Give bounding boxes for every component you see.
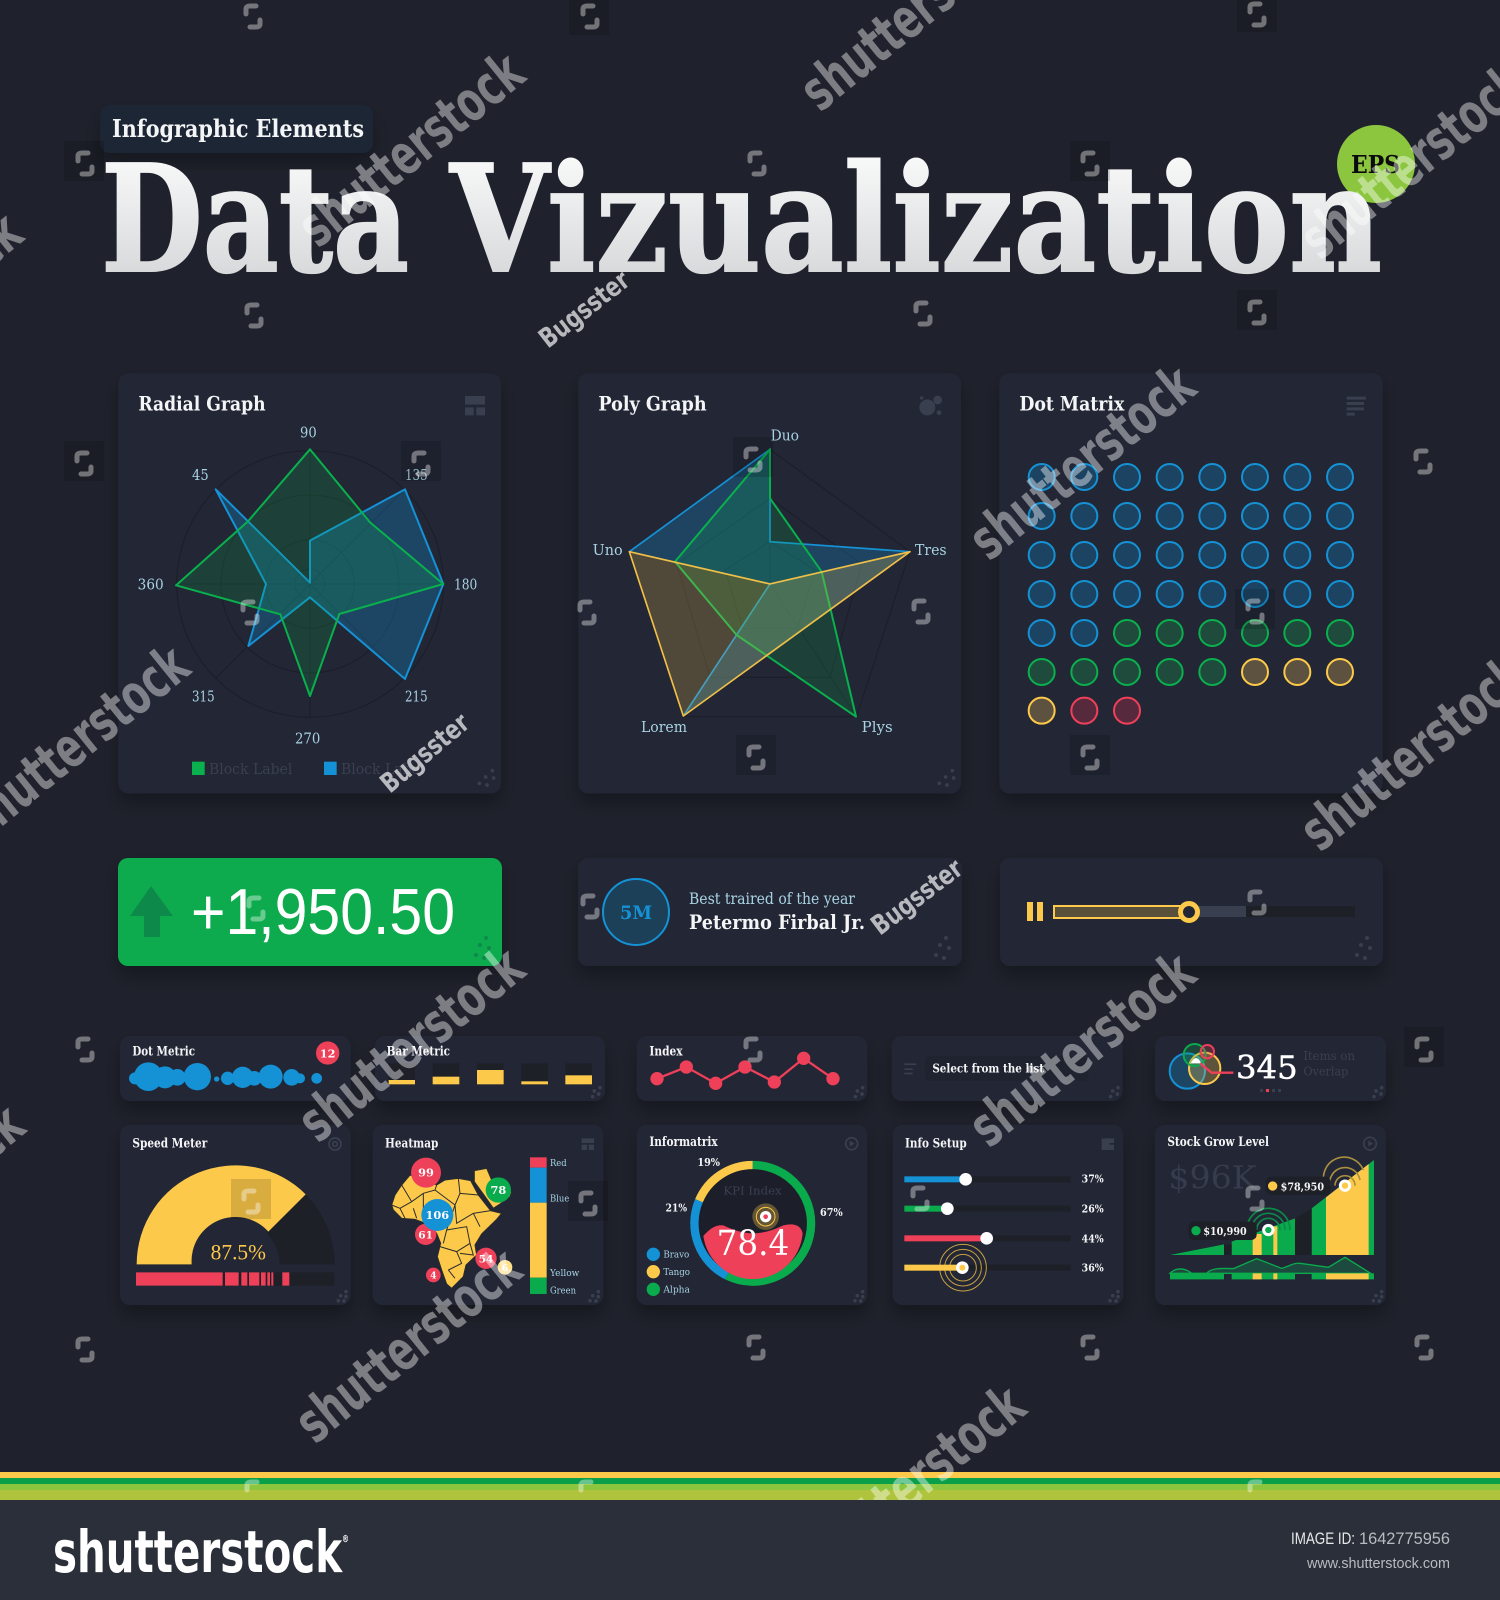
bubbles: 61 [418, 1228, 433, 1241]
venn diagram [1170, 1044, 1233, 1089]
bubbles: 54 [479, 1252, 493, 1265]
panel: Informatrix [637, 1125, 867, 1305]
axis labels: 90 [300, 423, 317, 441]
watermark: shutterstock text: shutterstock [286, 934, 538, 1155]
footer bar [0, 1500, 1500, 1600]
dark gap [1224, 1208, 1312, 1255]
dots: red [1071, 698, 1140, 724]
panel: Index [637, 1036, 867, 1101]
axis labels: 180 [454, 575, 477, 593]
axis labels: Tres [915, 541, 947, 559]
gauge track [267, 1194, 335, 1264]
panel: Select [892, 1036, 1123, 1101]
dots: blue [1029, 464, 1353, 646]
axis labels: 270 [295, 729, 320, 747]
KPI caption: KPI Index [723, 1183, 782, 1197]
panel: green value card [118, 858, 502, 966]
watermark: shutterstock text: shutterstock [787, 1372, 1039, 1593]
label pill: Infographic Elements [100, 105, 373, 153]
area chart yellow [1253, 1164, 1369, 1255]
panel: Info Setup [893, 1125, 1123, 1305]
axis labels: 315 [192, 688, 215, 706]
legend: Alpha [662, 1285, 691, 1295]
mini chart [1170, 1257, 1374, 1279]
name: Petermo Firbal Jr. [689, 910, 865, 934]
dots: yellow [1029, 659, 1353, 724]
axis labels: 45 [192, 466, 209, 484]
icon: list [1347, 397, 1366, 416]
footer logo: ® [342, 1534, 349, 1545]
label pill: Infographic Elements: Infographic Elements [112, 114, 364, 143]
heading: Dot Matrix [1019, 393, 1125, 416]
slider tracks [904, 1176, 1071, 1271]
select label: Select from the list [932, 1062, 1044, 1076]
panel: Dot Metric [120, 1036, 351, 1101]
percent labels: 44% [1082, 1231, 1104, 1245]
percent labels: 21% [666, 1200, 687, 1214]
watermark: Bugsster: Bugsster [533, 265, 636, 355]
markers [1264, 1181, 1350, 1235]
footer image id: www.shutterstock.com [1306, 1555, 1450, 1572]
title: Data [101, 132, 409, 306]
value: 345 [1236, 1048, 1298, 1086]
red bowl [703, 1224, 803, 1279]
progress track [1246, 906, 1355, 917]
donut chart [694, 1165, 811, 1282]
target [752, 1203, 779, 1230]
bubbles: 99 [418, 1166, 434, 1180]
value: +1,950.50 [191, 875, 455, 948]
stacked column [530, 1157, 547, 1294]
tooltip: $10,990: $10,990 [1203, 1224, 1247, 1238]
badge: EPS: EPS [1351, 150, 1400, 179]
KPI value: 78.4 [717, 1224, 789, 1264]
series: blue [629, 449, 910, 716]
tooltip: $10,990 [1188, 1222, 1257, 1240]
badge: 12 [320, 1046, 336, 1060]
radial grid [177, 451, 443, 717]
icon: play [846, 1138, 858, 1150]
series: green [675, 449, 856, 717]
signal rings [1247, 1157, 1363, 1230]
panel: Radial Graph [118, 373, 501, 793]
panel: media player [1000, 858, 1383, 966]
line chart [650, 1052, 840, 1090]
axis labels: 360 [138, 575, 164, 593]
percent labels: 67% [820, 1205, 843, 1219]
area chart green [1170, 1160, 1374, 1255]
caption: Overlap [1303, 1065, 1349, 1079]
axis labels: Uno [593, 541, 623, 559]
bubbles: 4 [430, 1271, 437, 1282]
heading: Poly Graph [598, 393, 707, 416]
series: green [176, 449, 443, 696]
caption: Best traired of the year [689, 889, 855, 908]
watermark: shutterstock text: shutterstock [957, 352, 1209, 573]
knob [1180, 904, 1198, 920]
series: yellow [629, 552, 910, 716]
panel: Dot Matrix [999, 373, 1383, 793]
column labels: Yellow [549, 1269, 580, 1279]
column labels: Red [550, 1159, 567, 1169]
bubbles [411, 1158, 512, 1282]
dots: green [1029, 620, 1353, 685]
title: Vizualization [449, 132, 1382, 306]
target rings [940, 1244, 986, 1291]
footer image id: IMAGE ID: [1291, 1529, 1355, 1548]
column labels: Green [550, 1286, 576, 1296]
legend: Block Label [341, 760, 424, 778]
bubbles: 6 [502, 1263, 508, 1274]
icon: menu [904, 1063, 916, 1074]
heading: Informatrix [649, 1134, 718, 1149]
heading: Bar Metric [387, 1043, 450, 1058]
series: blue [216, 489, 443, 679]
panel: Heatmap [373, 1125, 603, 1305]
heading: Stock Grow Level [1167, 1134, 1269, 1149]
select box [925, 1056, 1088, 1081]
bubbles [129, 1062, 322, 1091]
caption: Items on [1303, 1049, 1355, 1063]
bubbles: 106 [426, 1208, 449, 1222]
axis labels [593, 427, 947, 736]
legend: Tango [663, 1268, 690, 1278]
legend: Bravo [663, 1250, 689, 1260]
watermark: Bugsster: Bugsster [375, 707, 476, 799]
watermark: Bugsster: Bugsster [866, 853, 969, 942]
percent labels: 19% [697, 1155, 720, 1169]
footer logo: shutterstock [53, 1518, 469, 1586]
gauge value [137, 1165, 306, 1264]
axis labels [138, 423, 477, 747]
watermark: logo mark boxes [64, 0, 1444, 1221]
icon: play [1364, 1137, 1376, 1150]
footer image id: 1642775956 [1359, 1529, 1450, 1548]
icon: 5M circle: 5M [620, 902, 652, 924]
heading: Radial Graph [138, 393, 266, 416]
legend: Block Label [209, 760, 292, 778]
icon: layout [582, 1138, 594, 1150]
icon: up arrow [130, 886, 173, 937]
big value: $96K [1168, 1158, 1258, 1196]
axis labels: 215 [405, 688, 428, 706]
stacked bar [136, 1272, 334, 1286]
watermark: shutterstock text: shutterstock [283, 1235, 535, 1456]
bars [389, 1070, 592, 1084]
percent labels [1082, 1171, 1104, 1275]
badge: EPS [1337, 125, 1415, 203]
heading: Info Setup [905, 1135, 967, 1150]
panel: Speed Meter [120, 1125, 351, 1305]
axis labels: Duo [771, 427, 799, 445]
percent labels: 36% [1082, 1261, 1104, 1275]
panel: Overlap [1155, 1036, 1386, 1101]
heading: Index [649, 1043, 683, 1058]
panel: Stock Grow Level [1155, 1125, 1386, 1305]
percent labels: 37% [1082, 1171, 1104, 1185]
icon: dots [919, 396, 942, 415]
percent: 87.5% [211, 1239, 266, 1264]
icon: layout [465, 396, 485, 415]
panel: best trader [578, 858, 962, 966]
percent labels [666, 1155, 843, 1219]
axis labels: Plys [862, 718, 893, 736]
caption [1303, 1049, 1355, 1079]
icon: 5M circle [603, 879, 669, 945]
stripe band [0, 1472, 1500, 1500]
tooltip: $78,950: $78,950 [1281, 1179, 1324, 1193]
tooltip: $78,950 [1266, 1177, 1331, 1195]
heading: Heatmap [385, 1135, 438, 1150]
watermark: shutterstock text: shutterstock [957, 939, 1209, 1160]
progress fill [1054, 906, 1189, 918]
axis labels: Lorem [641, 718, 687, 736]
badge [316, 1041, 339, 1065]
percent labels: 26% [1082, 1201, 1104, 1215]
pager dots [1260, 1089, 1281, 1092]
icon: pause [1027, 902, 1043, 921]
legend [192, 760, 424, 778]
icon: target [329, 1138, 341, 1150]
axis labels: 135 [405, 466, 428, 484]
title [101, 132, 1382, 306]
legend [647, 1248, 691, 1296]
heading: Speed Meter [132, 1135, 208, 1150]
icon: layout [1102, 1138, 1114, 1150]
bubbles: 78 [490, 1183, 506, 1197]
panel: Poly Graph [578, 373, 961, 793]
panel: Bar Metric [375, 1036, 605, 1101]
knobs [941, 1173, 993, 1274]
pentagon grid [629, 449, 910, 717]
watermark: Bugsster [375, 265, 969, 942]
bar tracks [389, 1063, 592, 1084]
column labels [549, 1159, 580, 1296]
heading: Dot Metric [132, 1043, 195, 1058]
slider fills [904, 1176, 987, 1271]
footer image id [1291, 1529, 1450, 1572]
column labels: Blue [550, 1195, 569, 1205]
map of Africa [392, 1168, 512, 1288]
